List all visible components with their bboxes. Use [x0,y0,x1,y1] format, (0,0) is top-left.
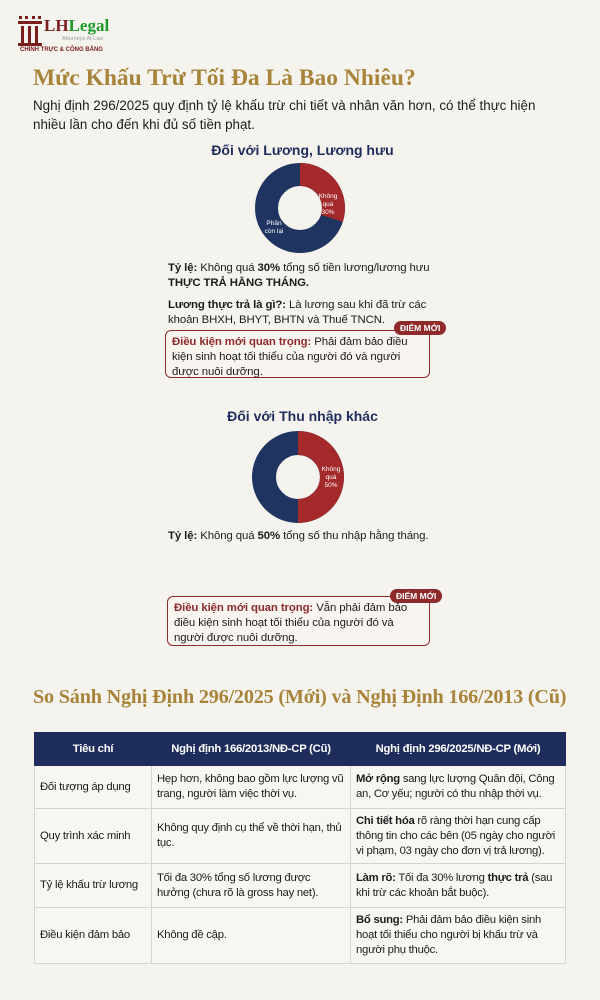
comparison table: Quy trình xác minh [40,830,130,842]
comparison table: Tỷ lệ khấu trừ lương [40,879,138,891]
subtitle: Nghị định 296/2025 quy định tỷ lệ khấu trừ chi tiết và nhân văn hơn, có thể thực hiện nhiều lần cho đến khi đủ số tiền phạt. [33,98,535,132]
text: rate: Tỷ lệ: Không quá 50% tổng số thu nhập hằng tháng. [168,530,428,542]
comparison table: Đối tượng áp dụng [40,780,130,792]
panel: other income [167,408,442,646]
comparison table: Mở rộng sang lực lượng Quân đội, Công an, Cơ yếu; người có thu nhập thời vụ. [356,773,554,800]
donut chart 30%: Phần [266,218,282,227]
section title: comparison: So Sánh Nghị Định 296/2025 (Mới) và Nghị Định 166/2013 (Cũ) [33,686,566,708]
comparison table: Không đề cập. [157,929,227,941]
comparison table: Nghị định 296/2025/NĐ-CP (Mới) [376,742,540,754]
comparison table [34,732,566,964]
badge [394,321,446,335]
badge [390,589,442,603]
comparison table: Điều kiện đảm bảo [40,929,130,941]
donut chart 30%: quá [323,201,334,208]
logo: LHLegal [44,16,109,35]
icon: logo mark [18,16,42,46]
comparison table: Tiêu chí [73,742,113,754]
donut chart 30% [255,163,345,253]
logo [18,16,109,53]
title: Mức Khấu Trừ Tối Đa Là Bao Nhiêu? [33,65,416,91]
comparison table: Tối đa 30% tổng số lương được hưởng (chưa rõ là gross hay net). [157,872,318,898]
donut chart 50%: 50% [324,482,338,489]
comparison table: Làm rõ: Tối đa 30% lương thực trả (sau khi trừ các khoản bắt buộc). [356,872,552,898]
comparison table: Nghị định 166/2013/NĐ-CP (Cũ) [171,742,331,754]
comparison table: Không quy định cụ thể về thời hạn, thủ tục. [157,822,341,849]
heading: Đối với Thu nhập khác [227,408,378,424]
comparison table: Bổ sung: Phải đảm bảo điều kiện sinh hoạt tối thiểu cho người bị khấu trừ và người phụ thuộc. [356,914,541,956]
comparison table: Hẹp hơn, không bao gồm lực lượng vũ trang, người làm việc thời vụ. [157,773,343,800]
callout: new condition: Điều kiện mới quan trọng: Phải đảm bảo điều kiện sinh hoạt tối thiểu của người đó và người được nuôi dưỡng. [172,336,408,378]
callout: new condition: Điều kiện mới quan trọng: Vẫn phải đảm bảo điều kiện sinh hoạt tối thiểu của người đó và người được nuôi dưỡng. [174,602,407,644]
donut chart 30%: Không [319,193,338,200]
donut chart 50%: quá [326,474,337,481]
donut chart 50%: Không [322,466,341,473]
donut chart 50% [252,431,344,523]
logo: Attorneys At Law [62,36,103,42]
panel: wages [165,142,446,378]
donut chart 30%: còn lại [265,228,283,235]
donut chart 30%: 30% [321,209,335,216]
text: rate: Tỷ lệ: Không quá 30% tổng số tiền lương/lương hưu THỰC TRẢ HẰNG THÁNG. [168,262,430,289]
badge: ĐIỂM MỚI [396,591,436,601]
text: net salary: Lương thực trả là gì?: Là lương sau khi đã trừ các khoản BHXH, BHYT, BHTN và Thuế TNCN. [168,299,426,326]
comparison table: Chi tiết hóa rõ ràng thời hạn cung cấp thông tin cho các bên (05 ngày cho người vi phạm, 03 ngày cho đơn vị trả lương). [356,814,555,856]
badge: ĐIỂM MỚI [400,323,440,333]
heading: Đối với Lương, Lương hưu [211,142,394,158]
logo: CHÍNH TRỰC & CÔNG BẰNG [20,47,103,53]
